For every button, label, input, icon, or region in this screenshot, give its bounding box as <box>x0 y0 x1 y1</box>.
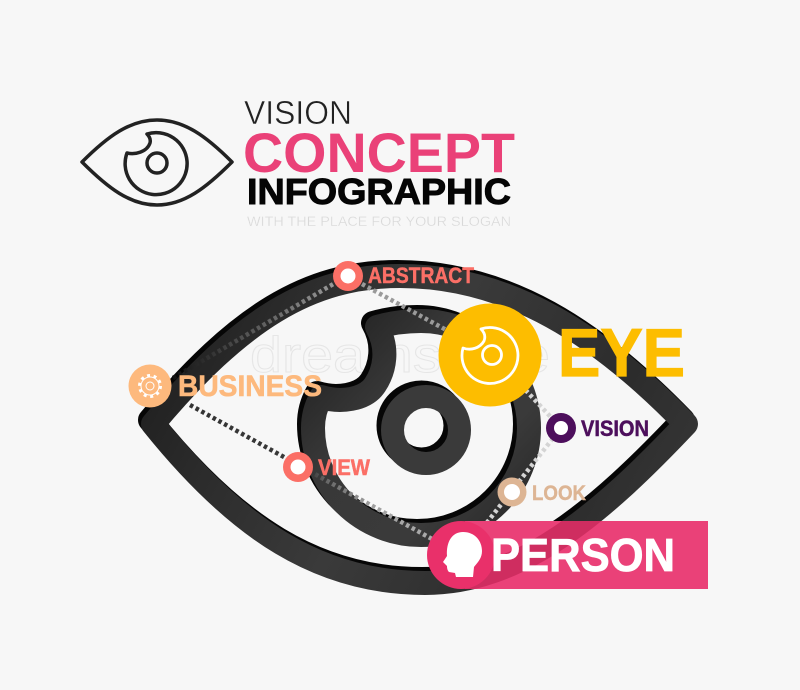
node: vision: VISION <box>581 416 649 441</box>
node: abstract <box>333 261 474 291</box>
title block <box>243 94 515 229</box>
node: vision <box>546 413 649 443</box>
node: business <box>128 364 322 408</box>
node: view: VIEW <box>318 455 370 480</box>
node: business: BUSINESS <box>178 370 322 403</box>
node: eye <box>438 304 685 406</box>
eye outline seen through banner <box>465 521 602 589</box>
large eye illustration <box>150 272 686 583</box>
banner circle <box>427 521 495 589</box>
watermark: dreamstime <box>250 327 550 383</box>
node: eye: EYE <box>558 315 685 391</box>
title: infographic: INFOGRAPHIC <box>247 171 511 212</box>
node: abstract: ABSTRACT <box>368 263 474 288</box>
eye outline <box>150 272 686 583</box>
title: concept: CONCEPT <box>243 121 515 184</box>
slogan: WITH THE PLACE FOR YOUR SLOGAN <box>247 213 511 229</box>
iris with bite <box>309 317 529 535</box>
node: look: LOOK <box>532 482 586 505</box>
icon: gear <box>140 376 160 396</box>
infographic canvas <box>80 100 708 595</box>
node: look <box>498 478 586 506</box>
icon: eye iris <box>462 328 518 384</box>
dotted connector lines <box>173 283 561 539</box>
pupil <box>388 392 460 464</box>
logo: outline eye icon <box>82 120 232 205</box>
icon: head silhouette <box>443 532 482 577</box>
person label: PERSON <box>491 529 675 581</box>
person banner <box>427 521 708 589</box>
banner bar <box>465 521 708 589</box>
title: vision: VISION <box>244 94 352 131</box>
node: view <box>283 452 370 482</box>
